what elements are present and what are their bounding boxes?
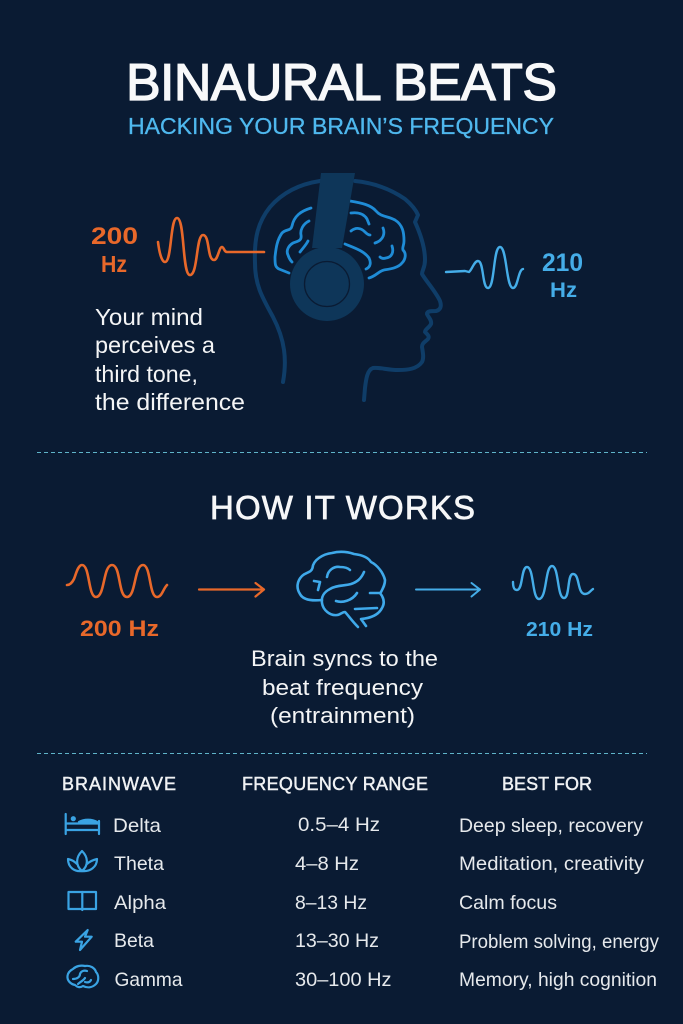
- right frequency label: 210 Hz: Hz: [550, 279, 577, 302]
- left orange wave: [158, 218, 264, 275]
- left frequency label: 200 Hz: [91, 223, 138, 277]
- orange arrow: [199, 583, 264, 596]
- brain icon: [298, 552, 385, 627]
- blue arrow: [416, 583, 480, 596]
- subtitle: HACKING YOUR BRAIN’S FREQUENCY: [128, 113, 554, 139]
- head with headphones illustration: [255, 173, 441, 400]
- table header: FREQUENCY RANGE: [242, 774, 428, 794]
- third tone caption: the difference: [95, 389, 245, 415]
- row: alpha: [68, 892, 557, 914]
- brain line art: [275, 201, 405, 278]
- row: gamma: [67, 966, 657, 991]
- entrainment caption: Brain syncs to the: [251, 646, 438, 671]
- row: delta: Delta: [113, 815, 161, 837]
- right frequency label: 210 Hz: [542, 249, 583, 302]
- row: gamma: Memory, high cognition: [459, 969, 657, 991]
- section heading: how it works: HOW IT WORKS: [210, 489, 475, 526]
- row: alpha: Alpha: [114, 892, 166, 914]
- right frequency label: 210 Hz: 210: [542, 249, 583, 277]
- row: theta: [68, 851, 644, 875]
- icon: bed: [66, 814, 99, 834]
- row: theta: Meditation, creativity: [459, 853, 644, 875]
- icon: open book: [68, 892, 96, 910]
- row: beta: Beta: [114, 930, 154, 952]
- row: beta: Problem solving, energy: [459, 931, 659, 953]
- row: gamma: Gamma: [114, 969, 183, 991]
- head outline: [255, 181, 441, 400]
- icon: brain cloud: [67, 966, 98, 987]
- orange input label: 200 Hz: [80, 616, 159, 641]
- entrainment caption: [251, 646, 438, 728]
- ear cup: [290, 247, 364, 321]
- row: theta: Theta: [114, 853, 164, 875]
- title: BINAURAL BEATS: [126, 54, 557, 112]
- entrainment caption: (entrainment): [270, 703, 415, 728]
- blue output label: 210 Hz: [526, 619, 593, 641]
- row: delta: Deep sleep, recovery: [459, 815, 643, 837]
- row: beta: 13–30 Hz: [295, 930, 379, 952]
- blue output wave: [513, 566, 593, 599]
- left frequency label: 200 Hz: Hz: [101, 251, 127, 277]
- row: delta: [66, 814, 643, 837]
- row: gamma: 30–100 Hz: [295, 969, 392, 991]
- right blue wave: [446, 247, 523, 288]
- entrainment caption: beat frequency: [262, 675, 424, 700]
- table header: BRAINWAVE: [62, 774, 176, 794]
- brainwave table: [62, 774, 659, 991]
- row: alpha: Calm focus: [459, 892, 557, 914]
- headband: [312, 173, 355, 248]
- third tone caption: perceives a: [95, 332, 216, 358]
- row: beta: [76, 930, 659, 953]
- row: delta: 0.5–4 Hz: [298, 814, 380, 836]
- icon: lightning bolt: [76, 930, 92, 950]
- table header: [62, 774, 592, 794]
- third tone caption: [95, 304, 245, 415]
- row: alpha: 8–13 Hz: [295, 892, 367, 914]
- left frequency label: 200 Hz: 200: [91, 223, 138, 250]
- third tone caption: Your mind: [95, 304, 203, 330]
- third tone caption: third tone,: [95, 361, 198, 387]
- row: theta: 4–8 Hz: [295, 853, 359, 875]
- orange input wave: [67, 565, 167, 597]
- table header: BEST FOR: [502, 774, 592, 794]
- icon: lotus: [68, 851, 97, 871]
